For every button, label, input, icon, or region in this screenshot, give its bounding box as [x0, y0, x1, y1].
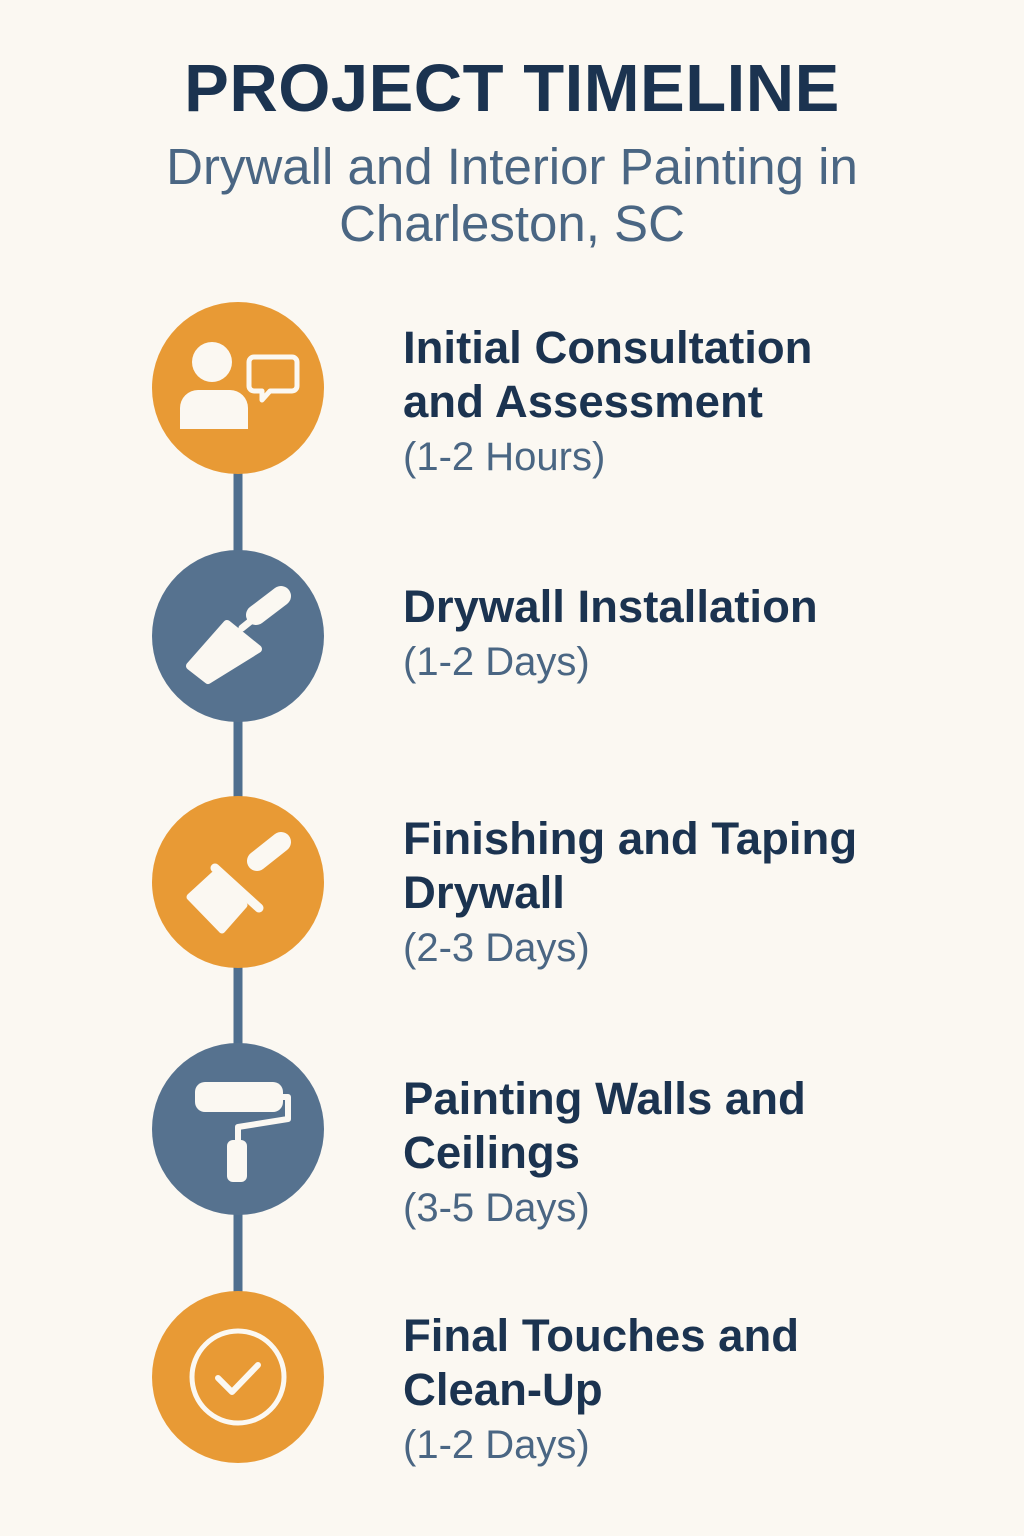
step 3 text: [403, 813, 857, 970]
connector line: [234, 400, 242, 1370]
step 4 text: [403, 1073, 806, 1230]
step 5 text: [403, 1310, 799, 1467]
subtitle: Drywall and Interior Painting in: [166, 138, 858, 195]
step 1 text: [403, 322, 812, 479]
step 4 text: Ceilings: [403, 1127, 580, 1178]
subtitle: [166, 138, 858, 252]
step 2 text: (1-2 Days): [403, 640, 590, 684]
step 5 text: (1-2 Days): [403, 1423, 590, 1467]
step 3 text: (2-3 Days): [403, 926, 590, 970]
step 3 text: Drywall: [403, 867, 565, 918]
step 1 text: and Assessment: [403, 376, 763, 427]
step 4 text: Painting Walls and: [403, 1073, 806, 1124]
step 1 text: Initial Consultation: [403, 322, 812, 373]
step 4 text: (3-5 Days): [403, 1186, 590, 1230]
subtitle: Charleston, SC: [339, 195, 685, 252]
icon: paint brush: [152, 796, 324, 968]
icon: trowel: [152, 550, 324, 722]
step 2 text: Drywall Installation: [403, 581, 818, 632]
step 5 text: Clean-Up: [403, 1364, 603, 1415]
icon: consultation: [152, 302, 324, 474]
step 5 text: Final Touches and: [403, 1310, 799, 1361]
step 2 text: [403, 581, 818, 684]
step 3 text: Finishing and Taping: [403, 813, 857, 864]
icon: check: [152, 1291, 324, 1463]
title: PROJECT TIMELINE: [184, 51, 840, 126]
step 1 text: (1-2 Hours): [403, 435, 605, 479]
icon: paint roller: [152, 1043, 324, 1215]
